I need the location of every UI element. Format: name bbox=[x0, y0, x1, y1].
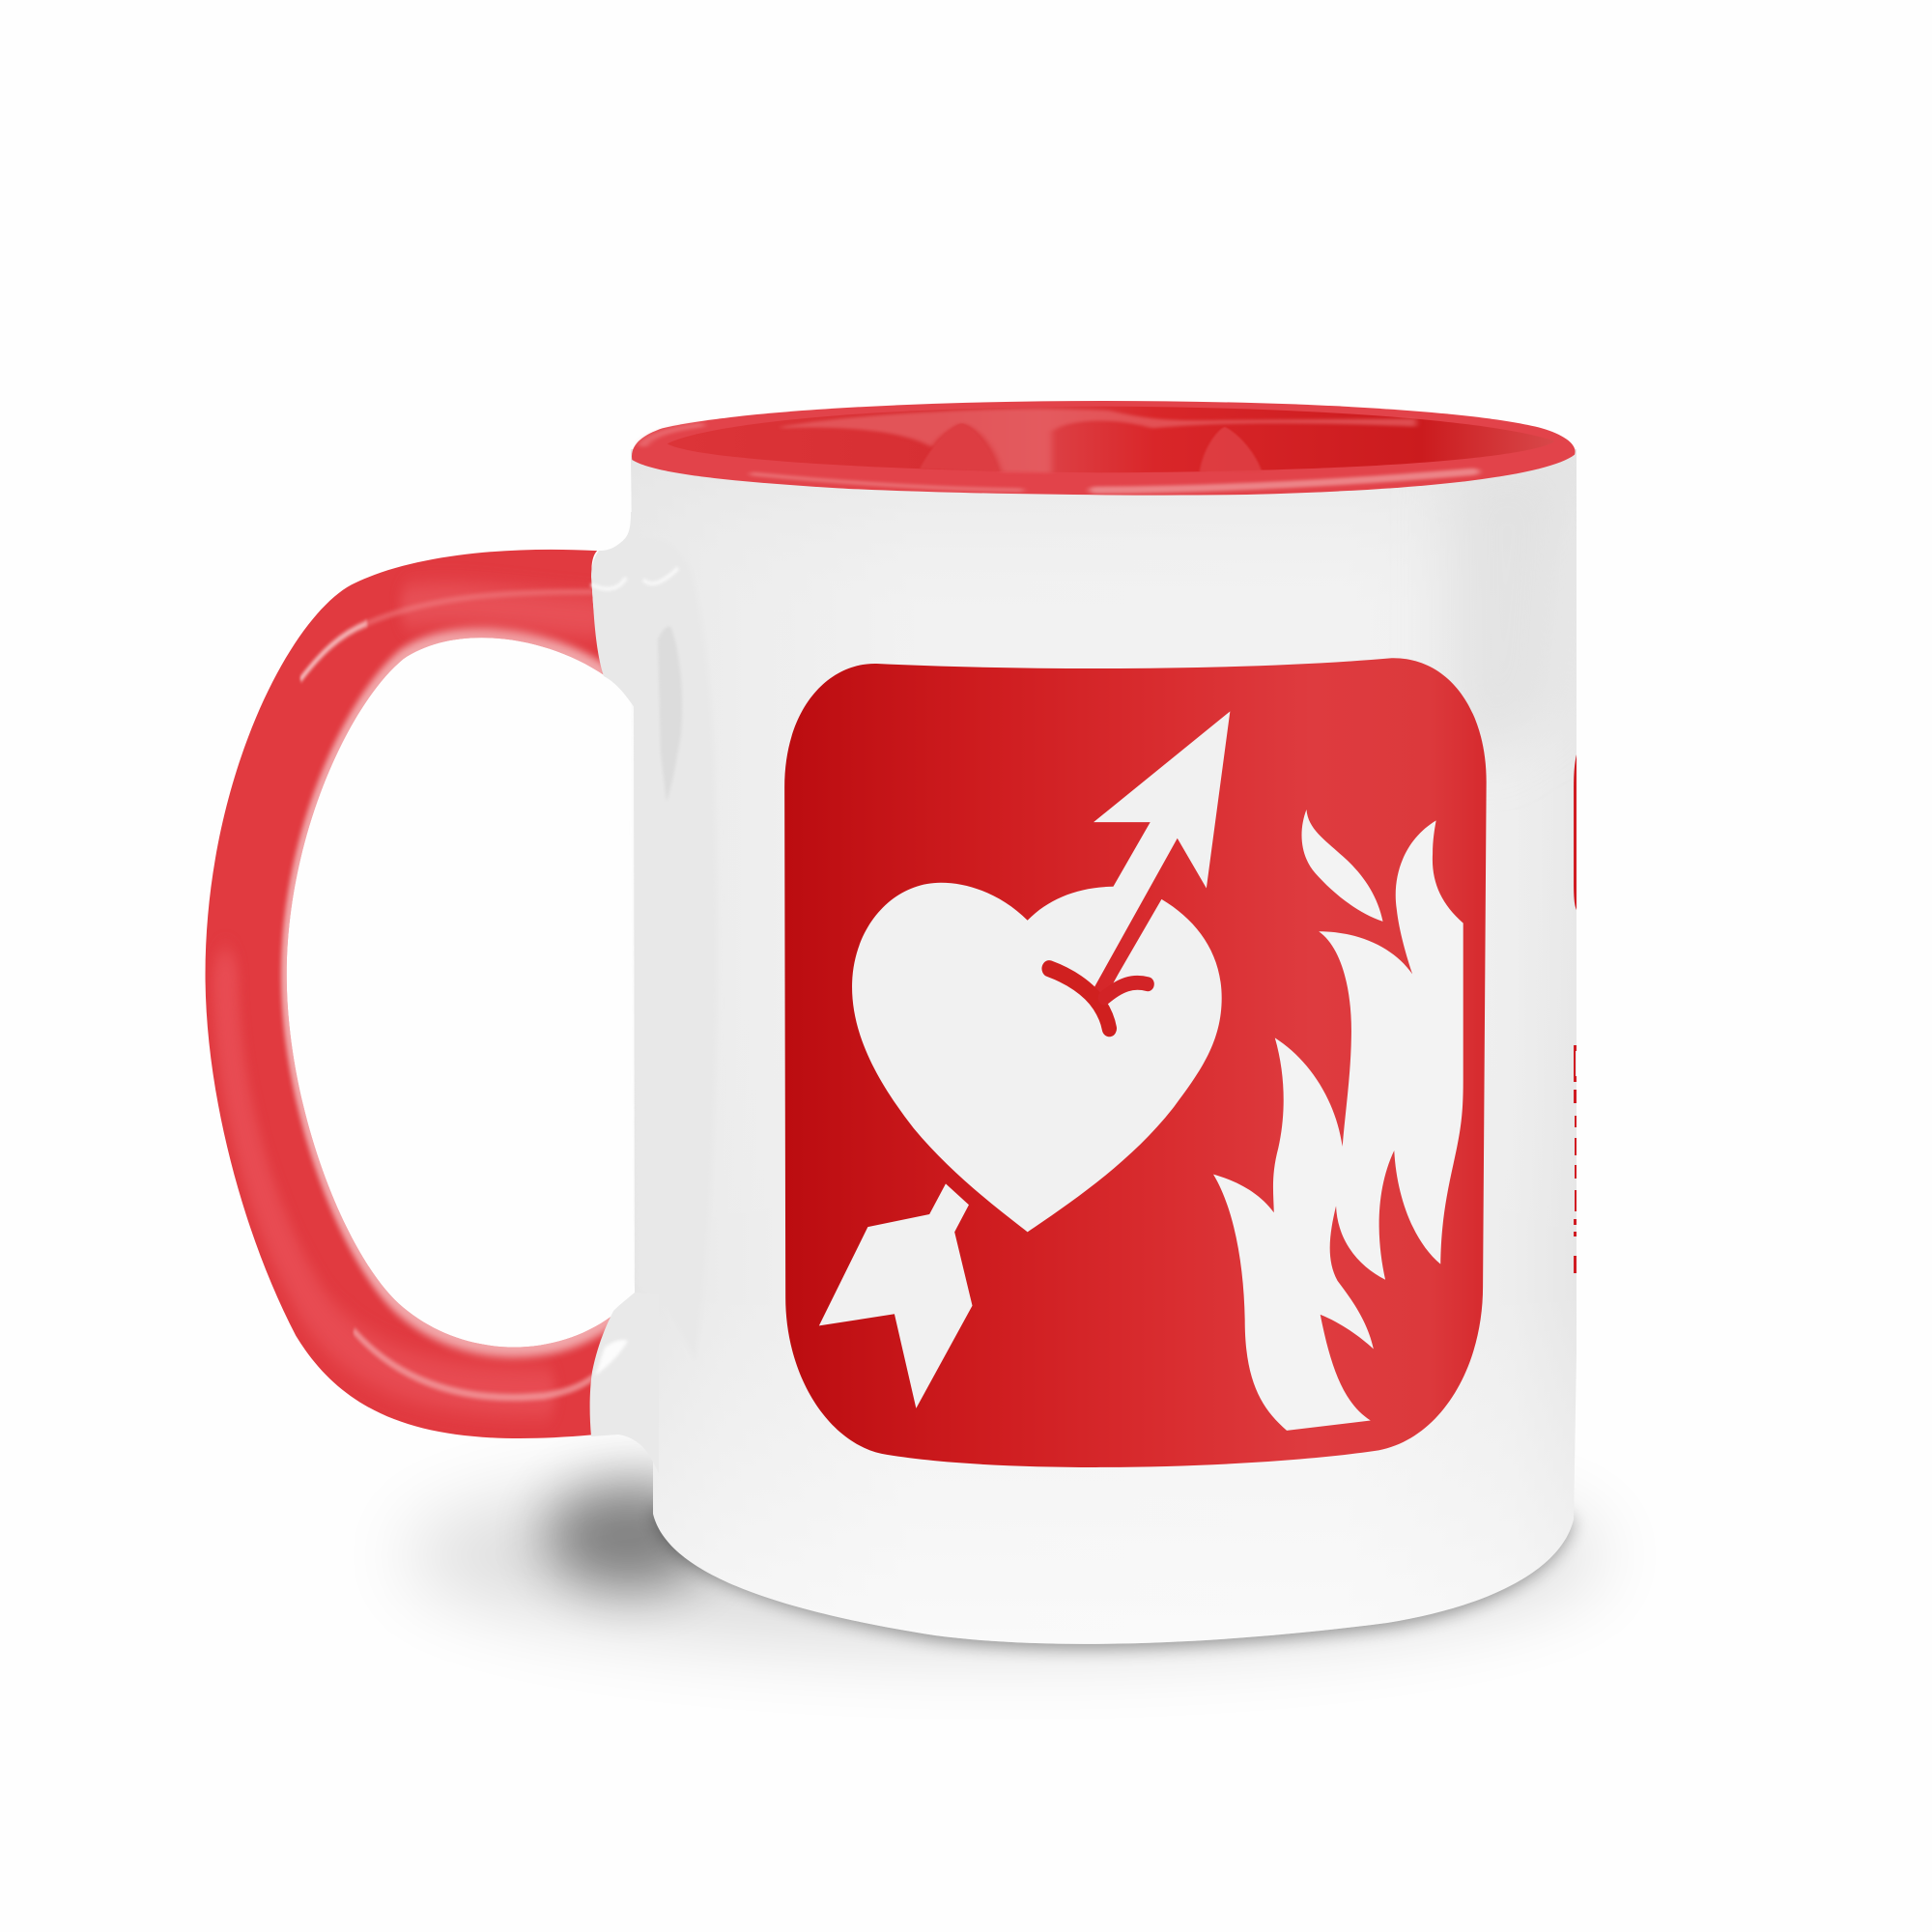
wrap-around print at right edge bbox=[1574, 754, 1577, 1273]
icon: small flame bbox=[1302, 810, 1383, 922]
ground shadow bbox=[406, 1449, 1604, 1652]
interior reflections bbox=[781, 410, 1416, 472]
red rounded panel bbox=[784, 658, 1487, 1467]
icon: large flames bbox=[1213, 820, 1463, 1431]
printed panel with heart and flames bbox=[784, 658, 1487, 1467]
mug body bbox=[631, 449, 1577, 1644]
rim outer bbox=[632, 401, 1576, 496]
mug product illustration bbox=[205, 401, 1603, 1675]
handle bbox=[206, 512, 678, 1473]
handle attachment shading on body bbox=[635, 538, 718, 1362]
body reflection upper right bbox=[1461, 495, 1542, 730]
handle top joint bbox=[591, 512, 639, 708]
rim gloss bbox=[753, 474, 1020, 490]
icon: heart pierced by arrow bbox=[852, 711, 1230, 1232]
handle bottom joint bbox=[590, 1293, 659, 1473]
icon: arrow fletching bbox=[819, 1183, 973, 1408]
interior bbox=[668, 407, 1554, 472]
mug rim and interior bbox=[632, 401, 1576, 496]
handle red loop bbox=[206, 550, 611, 1438]
handle gloss bbox=[226, 592, 611, 1398]
